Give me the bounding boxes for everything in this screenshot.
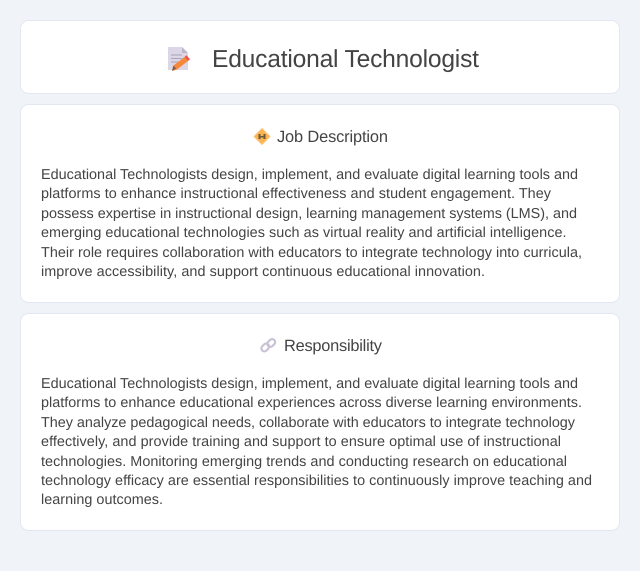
text block: job description: possess expertise in instructional design, learning management systems (LMS), and: [41, 206, 577, 222]
text block: responsibility: technology efficacy are essential responsibilities to continuously improve teaching and: [41, 473, 592, 489]
title: Educational Technologist: [212, 46, 479, 73]
text block: responsibility: [41, 376, 592, 508]
text block: job description: improve accessibility, and support continuous educational innovation.: [41, 264, 485, 280]
text block: job description: [41, 167, 582, 280]
icon: chain link: [260, 338, 276, 353]
panel: responsibility: [20, 314, 620, 530]
text block: job description: emerging educational technologies such as virtual reality and artificial intelligence.: [41, 225, 566, 241]
icon: document with pencil: [168, 47, 190, 71]
text block: job description: Their role requires collaboration with educators to integrate technology into curricula,: [41, 245, 582, 261]
panel: title card: [20, 20, 620, 94]
text block: responsibility: Educational Technologists design, implement, and evaluate digital learning tools and: [41, 376, 578, 392]
icon: diamond sign: [254, 128, 270, 144]
text block: responsibility: learning outcomes.: [41, 492, 163, 508]
heading: job description: Job Description: [277, 128, 388, 146]
text block: responsibility: technologies. Monitoring emerging trends and conducting research on educational: [41, 454, 567, 470]
panel: job description: [20, 104, 620, 302]
text block: responsibility: They analyze pedagogical needs, collaborate with educators to integrate technology: [41, 415, 576, 431]
heading: responsibility: Responsibility: [284, 337, 383, 355]
text block: responsibility: effectively, and provide training and support to ensure optimal use of instructional: [41, 434, 561, 450]
text block: job description: platforms to enhance instructional effectiveness and student engagement. They: [41, 186, 552, 202]
text block: job description: Educational Technologists design, implement, and evaluate digital learning tools and: [41, 167, 578, 183]
text block: responsibility: platforms to enhance educational experiences across diverse learning environments.: [41, 395, 582, 411]
